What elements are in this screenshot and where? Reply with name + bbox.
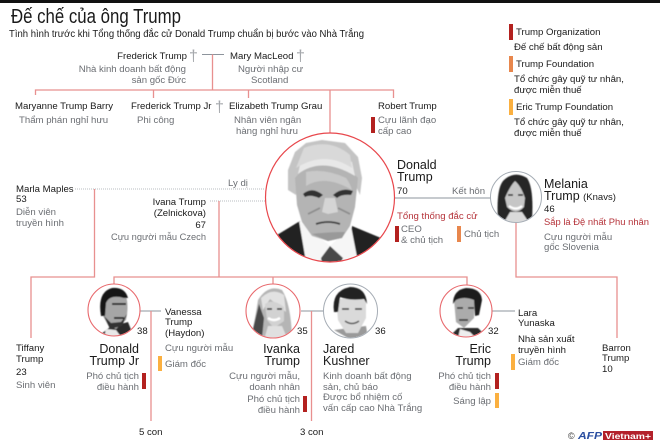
- portrait: Eric Trump: [440, 285, 492, 338]
- person: Robert Trump: Robert Trump: [378, 101, 437, 112]
- portrait: Donald Trump: [266, 133, 394, 264]
- person: Frederick Trump Jr: Frederick Trump Jr: [131, 101, 212, 112]
- person: Elizabeth Trump Grau: hàng nghỉ hưu: [236, 126, 298, 137]
- person: Marla Maples: Diễn viên: [16, 207, 56, 218]
- person: Donald Trump Jr text: điều hành: [97, 382, 139, 393]
- person: Mary MacLeod: [230, 48, 305, 86]
- legend: được miễn thuế: [514, 85, 582, 96]
- person: Lara Yunaska: truyền hình: [518, 345, 566, 356]
- legend: Trump Organization: [516, 27, 600, 38]
- person: Donald Trump Jr text: [86, 326, 148, 393]
- portrait: Donald Trump Jr: [88, 284, 140, 338]
- person: Jared Kushner text: [323, 326, 422, 414]
- person: Mary MacLeod: †: [296, 48, 305, 65]
- person: Ivanka Trump text: 35: [297, 326, 308, 337]
- person: Donald Trump: Donald: [397, 158, 437, 172]
- person: Melania Trump: Sắp là Đệ nhất Phu nhân: [544, 217, 649, 228]
- person: Mary MacLeod: Mary MacLeod: [230, 51, 293, 62]
- person: Eric Trump text: 32: [488, 326, 499, 337]
- person: Mary MacLeod: Người nhập cư: [238, 64, 304, 75]
- person: Tiffany Trump: Sinh viên: [16, 380, 55, 391]
- person: Vanessa Trump: Giám đốc: [165, 359, 206, 370]
- person: Barron Trump: Trump: [602, 353, 629, 364]
- person: Ivanka Trump text: Phó chủ tịch: [247, 394, 300, 405]
- credit: AFP Vietnam+: Vietnam+: [605, 431, 651, 441]
- person: Eric Trump text: điều hành: [449, 382, 491, 393]
- person: Jared Kushner text: sản, chủ báo: [323, 382, 378, 393]
- person: Donald Trump: Chủ tịch: [464, 229, 499, 240]
- legend: được miễn thuế: [514, 128, 582, 139]
- person: Melania Trump: 46: [544, 204, 555, 215]
- person: Jared Kushner text: vấn cấp cao Nhà Trắng: [323, 403, 422, 414]
- person: Maryanne Trump Barry: Thẩm phán nghỉ hưu: [19, 115, 108, 126]
- person: Ivanka Trump text: doanh nhân: [249, 382, 300, 393]
- person: Barron Trump: 10: [602, 364, 613, 375]
- person: Ivanka Trump text: Cựu người mẫu,: [229, 371, 300, 382]
- person: Ivana Trump: Ivana Trump: [153, 197, 206, 208]
- person: Maryanne Trump Barry: [15, 101, 113, 126]
- person: Barron Trump: [602, 343, 631, 375]
- person: Marla Maples: 53: [16, 194, 27, 205]
- person: Melania Trump: Trump (Knavs): [544, 189, 616, 203]
- legend: Trump Foundation: [516, 59, 594, 70]
- person: Vanessa Trump: [158, 307, 233, 371]
- portrait: Ivanka Trump: [246, 284, 300, 340]
- person: Tiffany Trump: 23: [16, 367, 27, 378]
- person: Vanessa Trump: Vanessa: [165, 307, 202, 318]
- person: Lara Yunaska: [511, 308, 575, 370]
- person: Donald Trump Jr text: Trump Jr: [89, 354, 139, 368]
- person: Jared Kushner text: Jared: [323, 342, 354, 356]
- person: Frederick Trump Jr: Phi công: [137, 115, 174, 126]
- person: Ivanka Trump text: Trump: [264, 354, 300, 368]
- person: Elizabeth Trump Grau: Nhân viên ngân: [234, 115, 301, 126]
- person: Lara Yunaska: Giám đốc: [518, 357, 559, 368]
- person: Donald Trump: Tổng thống đắc cử: [397, 211, 478, 222]
- person: Donald Trump: [395, 158, 499, 246]
- label: 5 con: 5 con: [139, 427, 162, 438]
- label: Ly dị: Ly dị: [228, 178, 248, 189]
- person: Jared Kushner text: Kushner: [323, 354, 370, 368]
- legend: Eric Trump Foundation: [516, 102, 613, 113]
- person: Frederick Trump: †: [189, 48, 198, 65]
- person: Ivanka Trump text: Ivanka: [263, 342, 300, 356]
- person: Jared Kushner text: 36: [375, 326, 386, 337]
- person: Frederick Trump Jr: †: [215, 99, 224, 116]
- person: Donald Trump: 70: [397, 186, 408, 197]
- person: Jared Kushner text: Kinh doanh bất động: [323, 371, 412, 382]
- person: Vanessa Trump: (Haydon): [165, 328, 204, 339]
- person: Donald Trump Jr text: Donald: [99, 342, 139, 356]
- credit: AFP Vietnam+: [568, 431, 653, 442]
- portrait: Jared Kushner: [324, 284, 378, 338]
- person: Donald Trump Jr text: 38: [137, 326, 148, 337]
- person: Eric Trump text: Eric: [469, 342, 491, 356]
- top black bar: [0, 0, 660, 3]
- person: Barron Trump: Barron: [602, 343, 631, 354]
- credit: AFP Vietnam+: ©: [568, 431, 575, 441]
- person: Elizabeth Trump Grau: Elizabeth Trump Grau: [229, 101, 322, 112]
- person: Jared Kushner text: Được bổ nhiệm cố: [323, 392, 403, 403]
- person: Eric Trump text: [438, 326, 499, 408]
- credit: AFP Vietnam+: AFP: [577, 431, 602, 442]
- legend: Tổ chức gây quỹ tư nhân,: [514, 74, 624, 85]
- label: Kết hôn: Kết hôn: [452, 186, 485, 197]
- person: Marla Maples: Marla Maples: [16, 184, 74, 195]
- person: Ivanka Trump text: [229, 326, 308, 416]
- person: Lara Yunaska: Lara: [518, 308, 538, 319]
- person: Frederick Trump: [79, 48, 198, 86]
- person: Ivana Trump: [111, 197, 206, 243]
- legend: [509, 24, 624, 139]
- person: Eric Trump text: Sáng lập: [453, 396, 491, 407]
- person: Frederick Trump: sản gốc Đức: [132, 75, 186, 86]
- person: Robert Trump: Cựu lãnh đạo: [378, 115, 436, 126]
- person: Marla Maples: truyền hình: [16, 218, 64, 229]
- person: Melania Trump: [544, 177, 649, 253]
- person: Lara Yunaska: Yunaska: [518, 318, 555, 329]
- portrait: Melania Trump: [490, 172, 542, 224]
- person: Frederick Trump: Nhà kinh doanh bất động: [79, 64, 186, 75]
- person: Melania Trump: Melania: [544, 177, 588, 191]
- person: Ivanka Trump text: điều hành: [258, 405, 300, 416]
- person: Elizabeth Trump Grau: [229, 101, 322, 137]
- person: Ivana Trump: Cựu người mẫu Czech: [111, 232, 206, 243]
- person: Tiffany Trump: [16, 343, 55, 391]
- label: 3 con: 3 con: [300, 427, 323, 438]
- person: Ivana Trump: 67: [195, 220, 206, 231]
- person: Tiffany Trump: Trump: [16, 354, 43, 365]
- person: Melania Trump: Cựu người mẫu: [544, 232, 612, 243]
- person: Marla Maples: [16, 184, 74, 229]
- family tree connector lines: [31, 54, 617, 421]
- subtitle: Tình hình trước khi Tổng thống đắc cử Donald Trump chuẩn bị bước vào Nhà Trắng: [9, 27, 364, 40]
- legend: Đế chế bất động sản: [514, 42, 603, 53]
- person: Mary MacLeod: Scotland: [251, 75, 288, 86]
- person: Ivana Trump: (Zelnickova): [154, 208, 206, 219]
- person: Melania Trump: gốc Slovenia: [544, 242, 600, 253]
- title: Đế chế của ông Trump: [11, 6, 181, 28]
- person: Frederick Trump: Frederick Trump: [117, 51, 187, 62]
- person: Frederick Trump Jr: [131, 99, 224, 126]
- person: Donald Trump: & chủ tịch: [401, 235, 443, 246]
- person: Donald Trump Jr text: Phó chủ tịch: [86, 371, 139, 382]
- person: Vanessa Trump: Cựu người mẫu: [165, 343, 233, 354]
- legend: Tổ chức gây quỹ tư nhân,: [514, 117, 624, 128]
- person: Robert Trump: cấp cao: [378, 126, 412, 137]
- person: Donald Trump: Trump: [397, 170, 433, 184]
- person: Robert Trump: [371, 101, 437, 137]
- person: Lara Yunaska: Nhà sản xuất: [518, 334, 575, 345]
- person: Vanessa Trump: Trump: [165, 317, 192, 328]
- person: Maryanne Trump Barry: Maryanne Trump Barry: [15, 101, 113, 112]
- person: Eric Trump text: Trump: [455, 354, 491, 368]
- person: Eric Trump text: Phó chủ tịch: [438, 371, 491, 382]
- person: Tiffany Trump: Tiffany: [16, 343, 44, 354]
- person: Donald Trump: CEO: [401, 224, 422, 235]
